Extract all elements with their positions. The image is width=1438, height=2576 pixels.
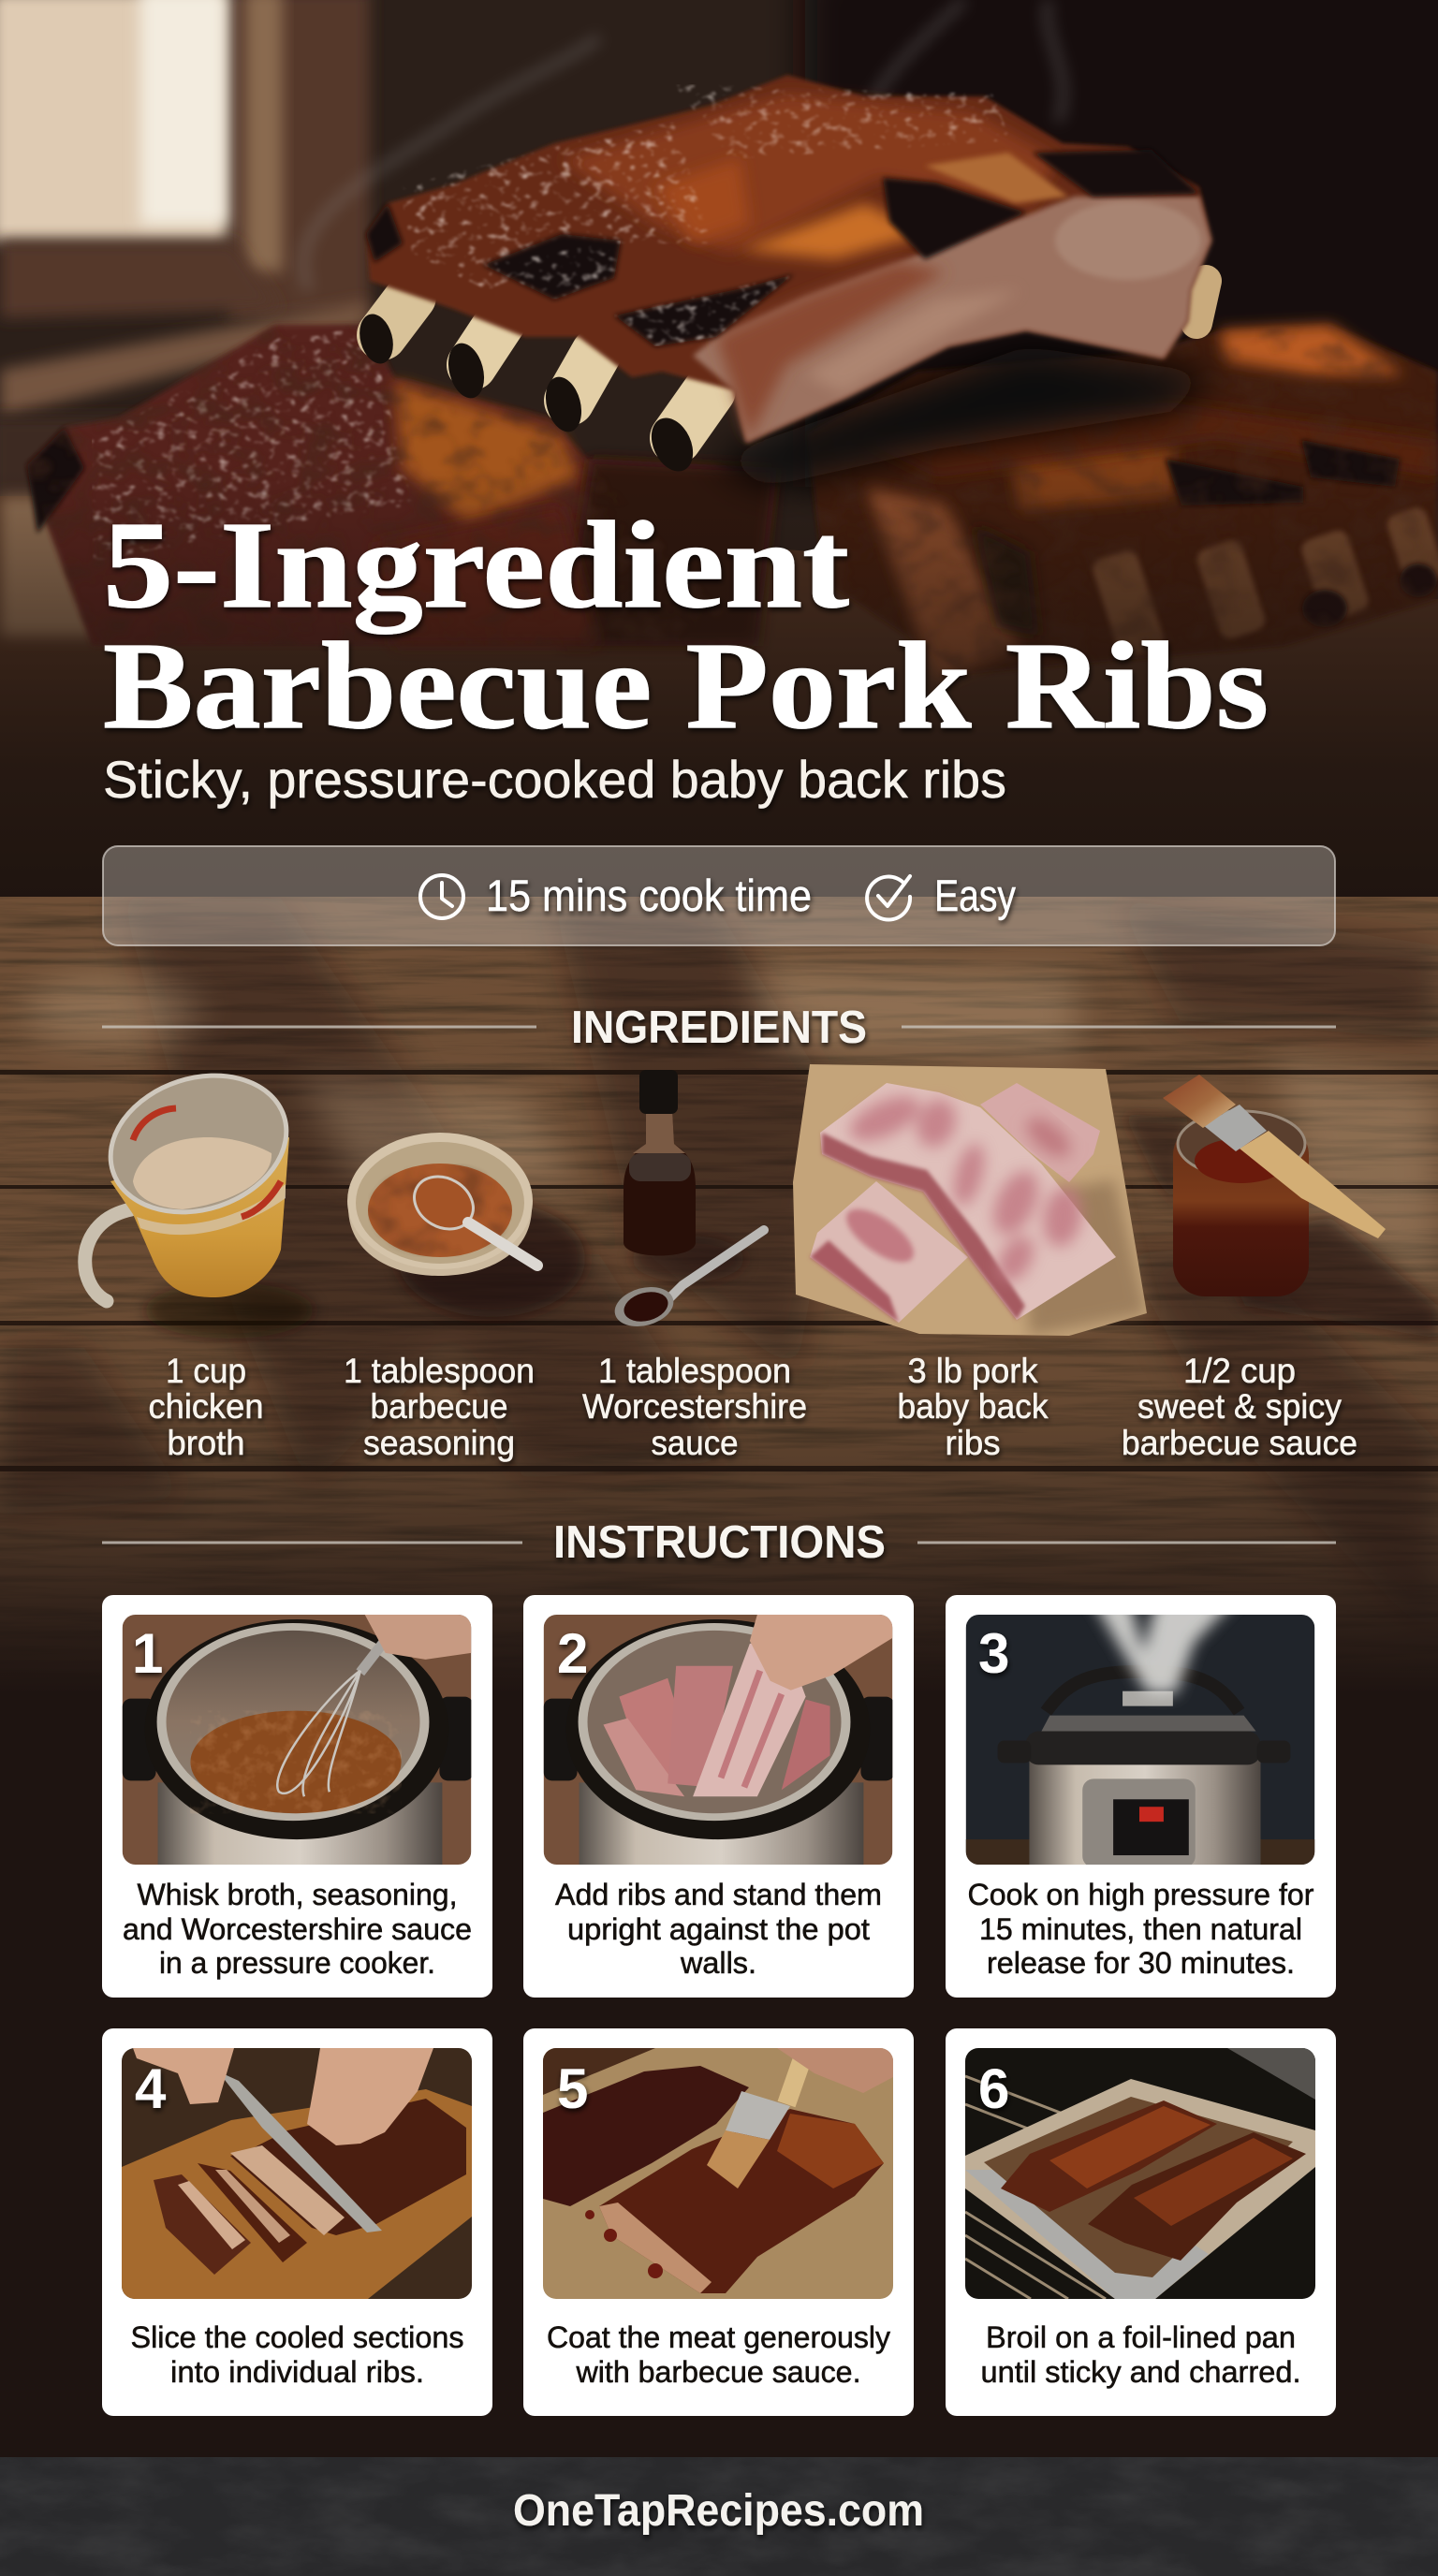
step number 5: 5: [557, 2057, 588, 2120]
white sheen specks: [400, 122, 712, 290]
step 2 text: [555, 1878, 882, 1980]
step 5 text: with barbecue sauce.: [575, 2355, 861, 2389]
step 5 image: brushing sauce on ribs: [543, 2048, 893, 2299]
steam wisps: [303, 0, 1064, 290]
step 4 text: into individual ribs.: [170, 2355, 424, 2389]
step 6 text: until sticky and charred.: [981, 2355, 1301, 2389]
step 1 text: [123, 1878, 472, 1980]
ingredient labels: [148, 1352, 1357, 1462]
label: Worcestershire sauce: [582, 1352, 807, 1462]
step number 3: 3: [978, 1622, 1009, 1685]
label: pork ribs: [897, 1352, 1049, 1462]
cutting board: [0, 496, 1438, 762]
label: barbecue sauce: 1/2 cup: [1183, 1352, 1296, 1390]
step 4 text: [131, 2320, 464, 2389]
step 1 card: [102, 1595, 492, 1998]
ingredient: Worcestershire sauce bottle and spoon: [610, 1070, 764, 1333]
label: barbecue seasoning: 1 tablespoon: [344, 1352, 535, 1390]
ingredient: sweet and spicy barbecue sauce with brush: [1123, 1075, 1438, 1339]
step 2 text: upright against the pot: [567, 1912, 870, 1946]
label: chicken broth: [148, 1352, 264, 1462]
label: barbecue seasoning: barbecue: [371, 1387, 507, 1426]
char patches: [366, 150, 1199, 346]
label: chicken broth: broth: [167, 1424, 245, 1462]
label: Worcestershire sauce: sauce: [652, 1424, 738, 1462]
step number 6: 6: [978, 2057, 1009, 2120]
window and frame: [0, 0, 370, 520]
label: Worcestershire sauce: 1 tablespoon: [598, 1352, 791, 1390]
step 4 image: slicing ribs on board: [122, 2048, 472, 2299]
step 6 text: [981, 2320, 1301, 2389]
step 3 text: release for 30 minutes.: [987, 1946, 1295, 1980]
step number 4: 4: [135, 2057, 167, 2120]
ingredient: pork baby back ribs on paper: [793, 1064, 1147, 1336]
step number 2: 2: [557, 1622, 588, 1685]
title: [103, 495, 1269, 754]
hero photo: stacked barbecue ribs: [0, 0, 1438, 897]
lower left rack of ribs: [27, 325, 777, 646]
step 4 card: [102, 2028, 492, 2416]
icon: check mark: [867, 876, 910, 920]
step 6 text: Broil on a foil-lined pan: [986, 2320, 1296, 2354]
step 1 text: in a pressure cooker.: [159, 1946, 435, 1980]
label: pork ribs: baby back: [897, 1387, 1049, 1426]
label: pork ribs: ribs: [946, 1424, 1000, 1462]
step 3 image: pressure cooker releasing steam: [966, 1615, 1314, 1865]
shadow under top rack: [712, 346, 1217, 487]
heading: ingredients: INGREDIENTS: [571, 1003, 867, 1053]
label: barbecue sauce: [1122, 1352, 1357, 1462]
label: pork ribs: 3 lb pork: [908, 1352, 1038, 1390]
bones: [355, 281, 1206, 478]
step 3 card: [946, 1595, 1336, 1998]
step 5 text: Coat the meat generously: [547, 2320, 890, 2354]
label: chicken broth: chicken: [148, 1387, 264, 1426]
step 3 text: [968, 1878, 1314, 1980]
step 6 card: [946, 2028, 1336, 2416]
label: barbecue sauce: barbecue sauce: [1122, 1424, 1357, 1462]
title: Barbecue Pork Ribs: [103, 616, 1269, 754]
icon: clock: [420, 875, 463, 918]
step 5 card: [523, 2028, 914, 2416]
label: Worcestershire sauce: Worcestershire: [582, 1387, 807, 1426]
step 6 image: broiling ribs on foil: [965, 2048, 1315, 2299]
label: barbecue seasoning: [344, 1352, 535, 1462]
step 2 text: walls.: [680, 1946, 756, 1980]
label: barbecue seasoning: seasoning: [363, 1424, 515, 1462]
whole silhouette: [366, 75, 1211, 443]
label: chicken broth: 1 cup: [166, 1352, 246, 1390]
lower hero dark overlay: [0, 468, 1438, 897]
label: barbecue sauce: sweet & spicy: [1137, 1387, 1342, 1426]
lower right rack of ribs: [807, 325, 1438, 683]
heading: instructions: INSTRUCTIONS: [553, 1517, 886, 1568]
top rack of ribs: [355, 75, 1211, 478]
step 2 card: [523, 1595, 914, 1998]
step 4 text: Slice the cooled sections: [131, 2320, 464, 2354]
lit glaze: [562, 94, 1058, 253]
step 2 text: Add ribs and stand them: [555, 1878, 882, 1911]
step 1 text: Whisk broth, seasoning,: [137, 1878, 457, 1911]
side meat: [693, 197, 1211, 443]
step 2 image: ribs standing in pot: [543, 1615, 893, 1865]
step 1 image: whisking broth in pot: [122, 1615, 472, 1865]
step 5 text: [547, 2320, 890, 2389]
subtitle: Sticky, pressure-cooked baby back ribs: [103, 750, 1006, 809]
panel: time and difficulty: [103, 846, 1335, 945]
step 3 text: Cook on high pressure for: [968, 1878, 1314, 1911]
footer website: OneTapRecipes.com: [513, 2486, 924, 2536]
footer bar: [0, 2457, 1438, 2576]
ingredient: barbecue seasoning bowl: [347, 1133, 585, 1317]
difficulty: Easy: [934, 871, 1016, 920]
title: 5-Ingredient: [103, 495, 849, 634]
cook time: 15 mins cook time: [486, 871, 812, 920]
wood table background: [0, 889, 1438, 1694]
ingredient: chicken broth in measuring cup: [85, 1054, 314, 1339]
step 3 text: 15 minutes, then natural: [979, 1912, 1302, 1946]
step 1 text: and Worcestershire sauce: [123, 1912, 472, 1946]
step number 1: 1: [132, 1622, 163, 1685]
